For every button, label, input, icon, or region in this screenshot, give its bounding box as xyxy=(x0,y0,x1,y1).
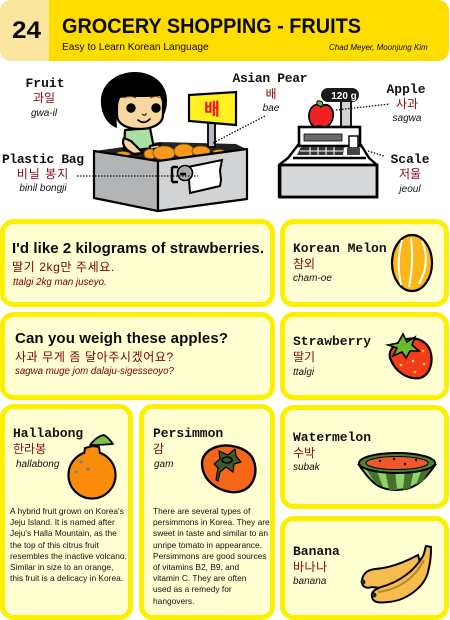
icon: hallabong xyxy=(68,435,116,498)
panel: banana: banana xyxy=(293,576,327,587)
panel: korean melon: Korean Melon xyxy=(293,241,387,256)
label: fruit: 과일 xyxy=(33,91,55,105)
panel: banana xyxy=(282,518,446,618)
panel: strawberries phrase xyxy=(2,222,272,304)
apple xyxy=(309,101,333,127)
panel: watermelon: subak xyxy=(293,462,321,473)
panel: banana: 바나나 xyxy=(293,560,328,574)
panel: korean melon: 참외 xyxy=(293,257,315,271)
panel: korean melon: cham-oe xyxy=(293,273,332,284)
sign: pear xyxy=(189,92,236,147)
label: asian pear: Asian Pear xyxy=(232,71,308,86)
illustration: vendor at fruit stall xyxy=(94,72,247,211)
body: persimmon: vitamin C. They are often xyxy=(153,573,247,583)
body: hallabong: this fruit is a delicacy in Korea. xyxy=(10,573,123,583)
body: persimmon: of vitamins B2, B9, and xyxy=(153,562,239,572)
stall interior xyxy=(95,142,246,160)
panel: hallabong: hallabong xyxy=(16,459,60,470)
body: hallabong: Similar in size to an orange, xyxy=(10,562,113,572)
label: asian pear: 배 xyxy=(265,87,277,101)
panel: korean melon xyxy=(282,222,446,304)
body: persimmon: used as a remedy for xyxy=(153,584,232,594)
scale body xyxy=(279,127,377,197)
label: asian pear xyxy=(232,71,308,114)
panel: strawberry xyxy=(282,314,446,398)
body: persimmon: There are several types of xyxy=(153,506,251,516)
panel: persimmon: gam xyxy=(154,459,173,470)
panel: watermelon xyxy=(282,408,446,506)
icon: banana xyxy=(360,546,431,602)
title: GROCERY SHOPPING - FRUITS xyxy=(62,15,361,38)
body: persimmon: hangovers. xyxy=(153,596,194,606)
body: persimmon: Persimmons are good sources xyxy=(153,551,267,561)
icon: korean melon xyxy=(392,235,432,291)
label: apple xyxy=(386,82,426,124)
panel: watermelon: 수박 xyxy=(293,446,315,460)
label: fruit xyxy=(25,76,65,119)
body: hallabong: A hybrid fruit grown on Korea's xyxy=(10,506,124,516)
label: fruit: Fruit xyxy=(25,76,65,91)
body: hallabong xyxy=(10,506,127,583)
box xyxy=(94,149,247,211)
panel: persimmon: Persimmon xyxy=(153,426,223,441)
label: fruit: gwa-il xyxy=(31,108,58,119)
body: hallabong: Jeju Island. It is named after xyxy=(10,517,115,527)
body: persimmon: persimmons in Korea. They are xyxy=(153,517,270,527)
vendor xyxy=(101,72,167,154)
panel: apples phrase: sagwa muge jom dalaju-sigesseoyo? xyxy=(15,366,174,377)
panel: persimmon: 감 xyxy=(153,442,164,456)
label: plastic bag xyxy=(2,152,84,194)
label: scale xyxy=(390,152,430,195)
icon: strawberry xyxy=(388,334,432,378)
panel: apples phrase xyxy=(2,314,272,398)
body: persimmon: sweet in taste and similar to an xyxy=(153,528,268,538)
panel: watermelon: Watermelon xyxy=(293,430,371,445)
panel: strawberry: ttalgi xyxy=(293,367,315,378)
label: apple: Apple xyxy=(386,82,426,97)
icon: persimmon xyxy=(202,445,255,492)
authors: Chad Meyer, Moonjung Kim xyxy=(329,43,428,52)
bag roll xyxy=(172,160,222,193)
body: hallabong: Jeju's Halla Mountain, as the xyxy=(10,528,117,538)
lesson number: 24 xyxy=(12,17,42,44)
panel: strawberry: 딸기 xyxy=(293,350,315,364)
label: scale: 저울 xyxy=(399,167,421,181)
fruit pile xyxy=(116,144,225,160)
panel: hallabong xyxy=(2,406,130,618)
sign: pear: 배 xyxy=(204,100,220,119)
icon: watermelon xyxy=(359,453,435,490)
dotted leader lines xyxy=(77,104,390,176)
body: hallabong: resembles the inactive volcano. xyxy=(10,551,127,561)
panel: strawberry: Strawberry xyxy=(293,334,371,349)
label: scale: Scale xyxy=(390,152,430,167)
panel: strawberries phrase: 딸기 2kg만 주세요. xyxy=(12,260,115,274)
panel: strawberries phrase: I'd like 2 kilograms of strawberries. xyxy=(12,240,264,257)
panel: persimmon xyxy=(142,406,272,618)
panel: hallabong: Hallabong xyxy=(13,426,83,441)
label: plastic bag: 비닐 봉지 xyxy=(17,167,69,181)
label: plastic bag: Plastic Bag xyxy=(2,152,84,167)
label: apple: 사과 xyxy=(396,97,418,111)
header banner xyxy=(0,0,449,61)
body: persimmon xyxy=(153,506,270,606)
label: scale: jeoul xyxy=(397,184,421,195)
scale display: 120 g xyxy=(331,91,357,102)
subtitle: Easy to Learn Korean Language xyxy=(62,42,209,53)
label: apple: sagwa xyxy=(393,113,422,124)
body: persimmon: unripe tomato in appearance. xyxy=(153,540,262,550)
panel: apples phrase: Can you weigh these apples? xyxy=(15,330,228,347)
panel: strawberries phrase: ttalgi 2kg man juseyo. xyxy=(13,277,107,288)
body: hallabong: the top of this citrus fruit xyxy=(10,540,100,550)
illustration: scale with apple xyxy=(279,88,377,197)
panel: hallabong: 한라봉 xyxy=(13,442,46,456)
label: asian pear: bae xyxy=(263,103,280,114)
panel: banana: Banana xyxy=(293,544,340,559)
panel: apples phrase: 사과 무게 좀 달아주시겠어요? xyxy=(15,350,174,364)
label: plastic bag: binil bongji xyxy=(19,183,67,194)
